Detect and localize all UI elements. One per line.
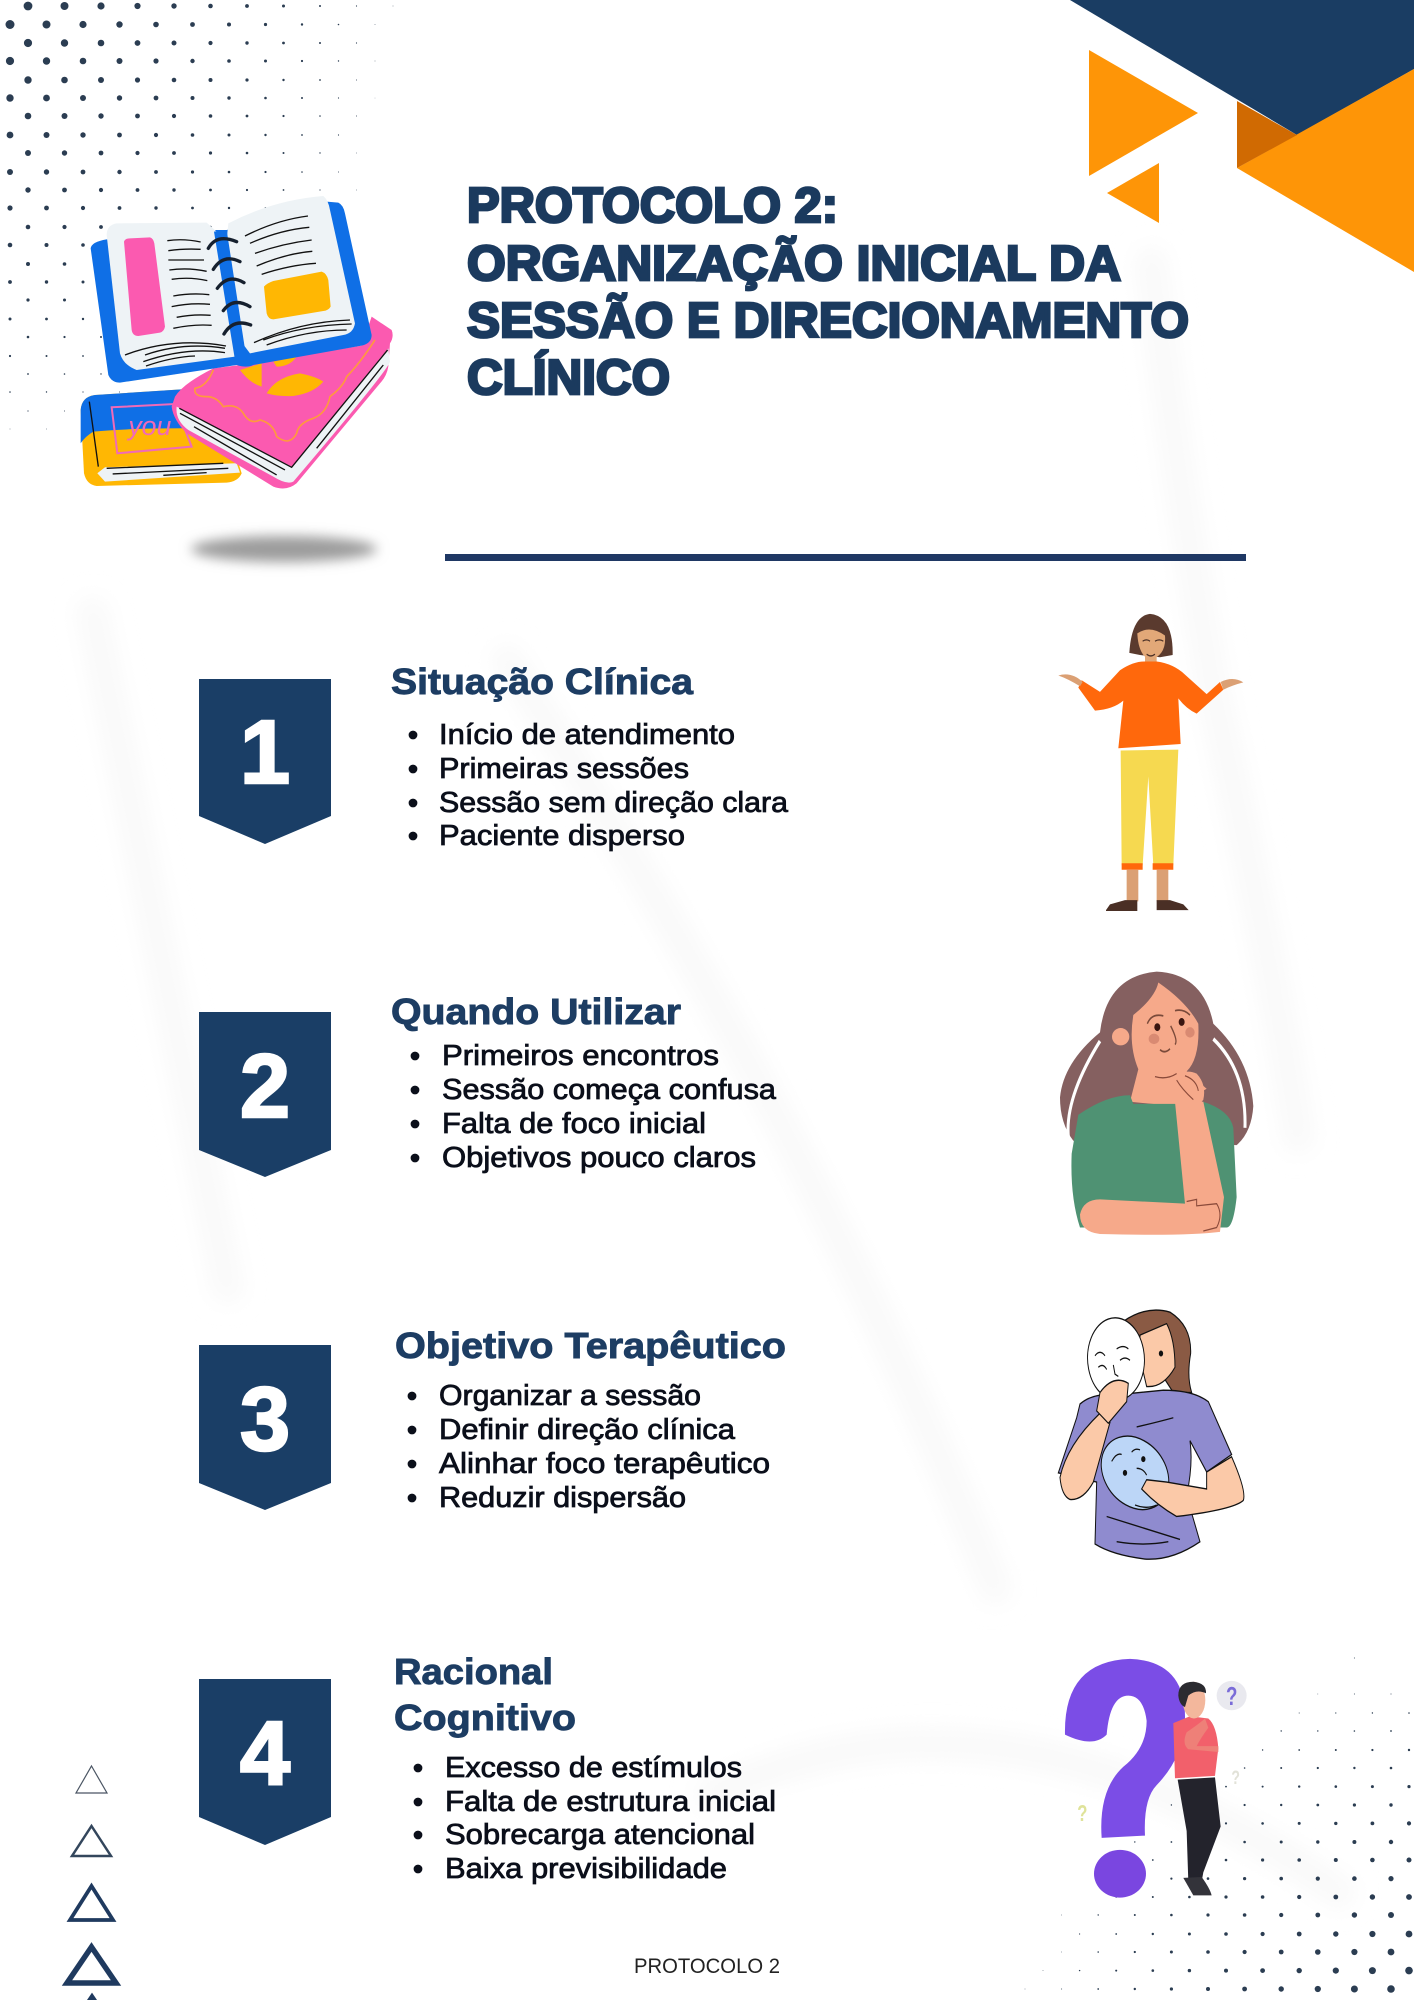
panel: situação clínica: Situação Clínica [391,661,694,702]
panel: objetivo terapêutico: Objetivo Terapêutico [395,1325,786,1366]
badge 3: 3 [240,1370,290,1470]
title rule [445,554,1246,561]
icon: woman shrugging [1058,614,1243,911]
title: ORGANIZAÇÃO INICIAL DA [467,237,1121,291]
icon: man with question mark: ? [1226,1682,1237,1710]
panel: racional cognitivo [394,1651,776,1885]
icon: woman with masks [1058,1309,1244,1559]
panel: racional cognitivo: Excesso de estímulos [445,1752,742,1784]
panel: objetivo terapêutico: Reduzir dispersão [439,1482,686,1514]
panel: objetivo terapêutico: Organizar a sessão [439,1380,701,1412]
icon: man with question mark [1065,1659,1247,1898]
badge 3 [199,1345,331,1510]
title: PROTOCOLO 2: [467,179,838,233]
badge 4: 4 [240,1704,290,1804]
icon: thoughtful woman [1060,972,1253,1235]
book shadow [191,536,377,562]
footer label: PROTOCOLO 2 [634,1955,780,1978]
panel: situação clínica: Sessão sem direção clara [439,787,789,819]
panel: racional cognitivo: Sobrecarga atencional [445,1819,755,1851]
icon: man with question mark: ? [1077,1801,1087,1827]
panel: objetivo terapêutico: Alinhar foco terapêutico [439,1448,770,1480]
panel: situação clínica: Primeiras sessões [439,753,689,785]
dot pattern: top left [6,2,393,429]
icon: stack of books [81,196,393,489]
icon: stack of books: you [126,411,171,441]
title: SESSÃO E DIRECIONAMENTO [467,294,1189,348]
panel: situação clínica: Paciente disperso [439,820,685,852]
panel: objetivo terapêutico [395,1325,786,1514]
panel: racional cognitivo: Baixa previsibilidade [445,1853,727,1885]
dot pattern: bottom right [1025,1658,1413,1993]
panel: quando utilizar: Primeiros encontros [442,1040,719,1072]
triangle stack [66,1766,118,2000]
icon: man with question mark: ? [1231,1767,1240,1789]
title [467,179,1189,405]
badge 1 [199,679,331,844]
panel: quando utilizar [391,991,777,1174]
panel: racional cognitivo: Cognitivo [394,1697,576,1738]
badge 1: 1 [240,703,290,803]
badge 2: 2 [240,1037,290,1137]
panel: racional cognitivo: Falta de estrutura inicial [445,1786,776,1818]
panel: quando utilizar: Sessão começa confusa [442,1074,777,1106]
panel: quando utilizar: Falta de foco inicial [442,1108,706,1140]
panel: racional cognitivo: Racional [394,1651,553,1692]
panel: quando utilizar: Quando Utilizar [391,991,681,1032]
badge 4 [199,1679,331,1845]
panel: quando utilizar: Objetivos pouco claros [442,1142,756,1174]
panel: objetivo terapêutico: Definir direção clínica [439,1414,736,1446]
panel: situação clínica: Início de atendimento [439,719,735,751]
panel: situação clínica [391,661,789,852]
decorative corner: navy and orange triangles [1070,0,1414,272]
badge 2 [199,1012,331,1177]
title: CLÍNICO [467,351,670,405]
